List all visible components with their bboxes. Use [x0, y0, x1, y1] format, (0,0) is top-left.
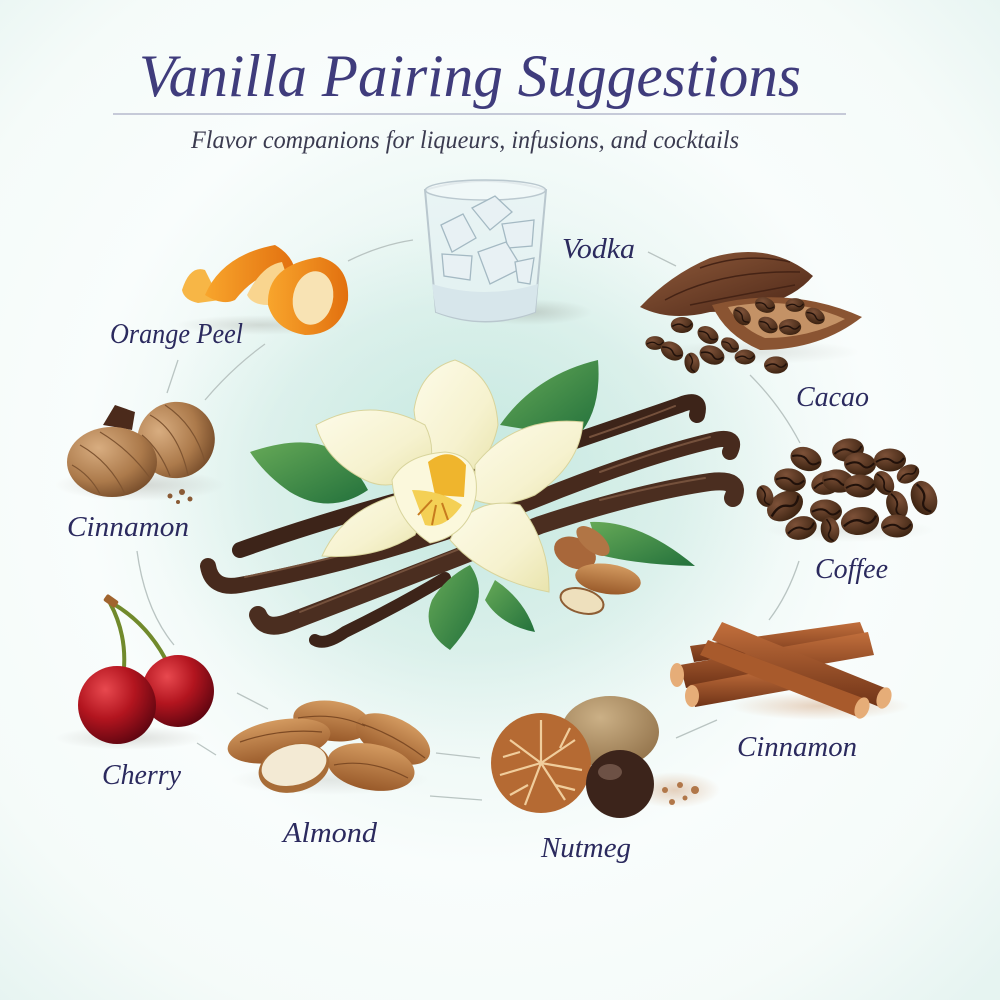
illustration: cacao [640, 252, 862, 375]
label: Cinnamon (left): Cinnamon [67, 511, 189, 543]
title: Vanilla Pairing Suggestions [139, 43, 801, 109]
illustration: whole spice nuts [55, 389, 227, 504]
leaves [250, 360, 695, 566]
illustration: cherries [55, 594, 214, 750]
vanilla pods [208, 402, 735, 642]
label: Orange Peel: Orange Peel [110, 318, 243, 350]
petals [316, 360, 583, 592]
connector lines [137, 240, 800, 800]
lower leaves [429, 565, 535, 650]
label: Vodka: Vodka [562, 233, 635, 265]
illustration: vodka glass [425, 180, 592, 325]
label: Cinnamon (right): Cinnamon [737, 731, 857, 763]
central glow [140, 210, 800, 750]
illustration: orange peel [175, 245, 348, 335]
illustration: nutmeg [491, 696, 720, 818]
label: Cacao: Cacao [796, 381, 869, 413]
illustration: coffee beans [754, 436, 942, 544]
orchid centre [412, 454, 466, 526]
small almonds [549, 520, 643, 618]
illustration: cinnamon sticks [670, 622, 910, 721]
label: Coffee: Coffee [815, 553, 888, 585]
title rule [113, 113, 846, 115]
subtitle: Flavor companions for liqueurs, infusions, and cocktails [190, 127, 739, 154]
label: Nutmeg: Nutmeg [540, 832, 631, 864]
illustration: almonds [224, 696, 438, 800]
label: Almond: Almond [281, 817, 378, 849]
central illustration: vanilla orchid, pods and leaves [208, 360, 735, 650]
label: Cherry: Cherry [102, 759, 181, 791]
